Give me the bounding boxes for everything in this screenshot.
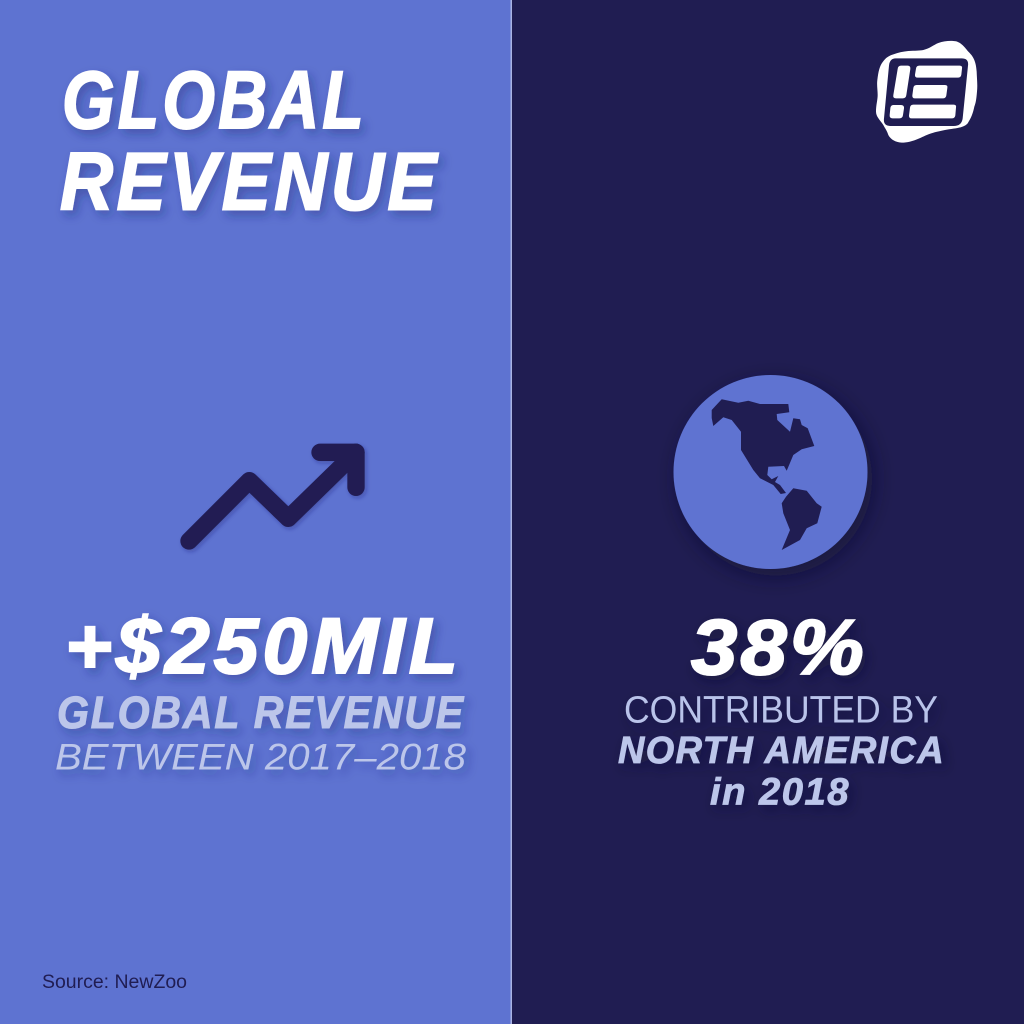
stat value: +$250MIL: [65, 601, 462, 690]
title: REVENUE: [60, 136, 440, 228]
stat period: BETWEEN 2017–2018: [55, 736, 466, 778]
share label line three: in 2018: [710, 772, 850, 814]
stat: North America share: [618, 603, 945, 814]
panel: right regional background: [511, 0, 1024, 1024]
share label line two: NORTH AMERICA: [618, 730, 945, 772]
stat label: GLOBAL REVENUE: [57, 687, 465, 738]
icon: brand logo: [876, 41, 977, 143]
icon: globe showing the Americas: [674, 375, 868, 569]
icon: rising trend arrow: [189, 452, 356, 541]
stat: revenue growth: [55, 601, 466, 778]
title: [60, 55, 440, 228]
source note: Source: NewZoo: [42, 972, 187, 993]
share label line one: CONTRIBUTED BY: [624, 690, 938, 732]
panel: left revenue background: [0, 0, 511, 1024]
share value: 38%: [691, 603, 867, 691]
title: GLOBAL: [62, 55, 367, 146]
